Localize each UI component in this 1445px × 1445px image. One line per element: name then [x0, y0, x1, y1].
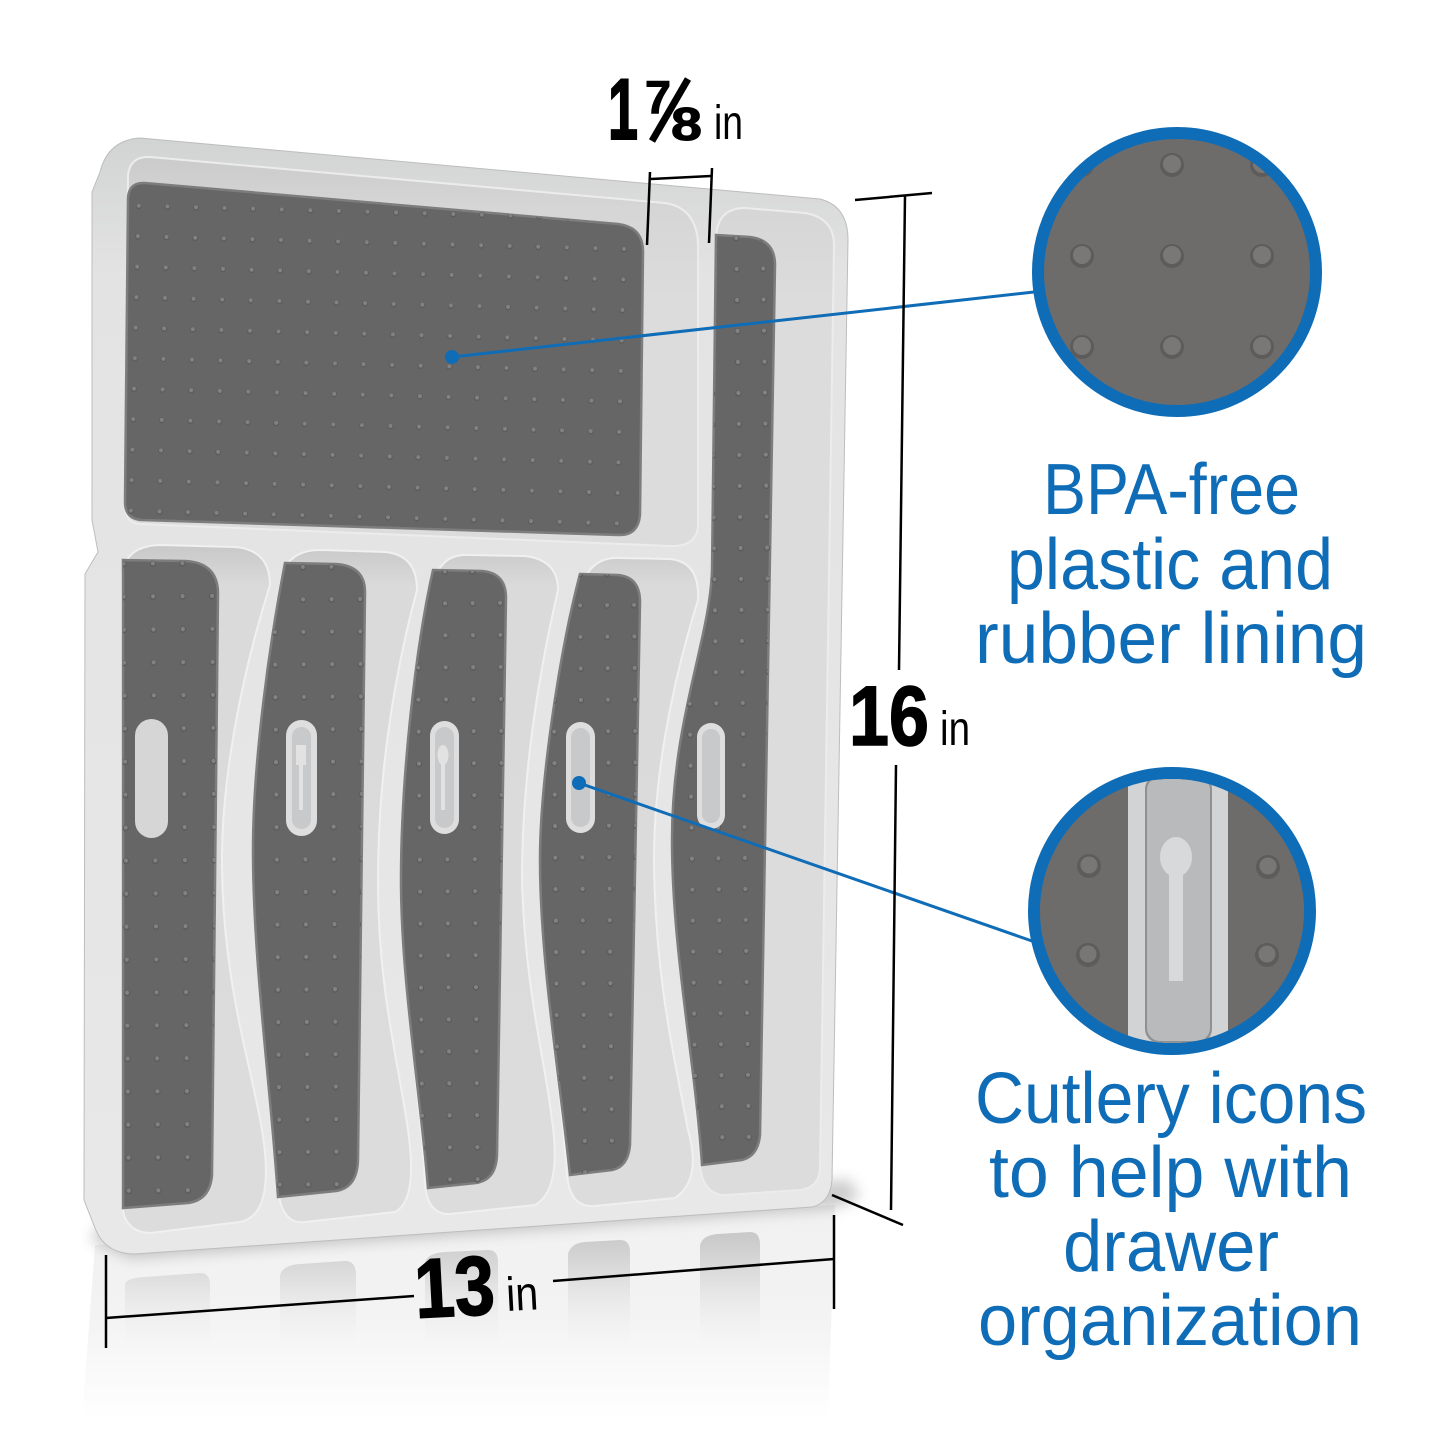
dimension: 16 in height: 16: [849, 669, 929, 763]
dimension: 13 in width: in: [505, 1267, 540, 1322]
slot 3: [401, 555, 558, 1214]
leader line: rubber lining: [445, 292, 1034, 364]
tray reflection: [82, 1205, 835, 1420]
tray body: [84, 138, 848, 1254]
dimension: 1 7/8 in width: 7: [645, 71, 671, 123]
cutlery tray: [84, 138, 848, 1254]
slot 1: [122, 545, 270, 1233]
heading: Cutlery icons to help with drawer organization: organization: [978, 1281, 1362, 1361]
heading: Cutlery icons to help with drawer organization: drawer: [1063, 1207, 1279, 1287]
dimension: 13 in width: 13: [412, 1238, 497, 1336]
heading: BPA-free plastic and rubber lining: [975, 450, 1367, 679]
dimension: 1 7/8 in width: 8: [671, 98, 702, 150]
dimension: 1 7/8 in width: [608, 62, 743, 245]
heading: Cutlery icons to help with drawer organization: Cutlery icons: [975, 1059, 1367, 1139]
heading: Cutlery icons to help with drawer organization: to help with: [989, 1133, 1352, 1213]
cutlery label pills: [135, 719, 725, 838]
heading: BPA-free plastic and rubber lining: rubber lining: [975, 599, 1367, 679]
dimension: 1 7/8 in width: in: [714, 97, 743, 150]
dimension: 13 in width: [106, 1215, 834, 1348]
dimension: 16 in height: in: [940, 703, 970, 756]
callout circle: cutlery icon detail: [1034, 770, 1310, 1060]
heading: BPA-free plastic and rubber lining: plastic and: [1007, 525, 1333, 605]
callout circle: rubber lining detail: [1038, 133, 1316, 411]
long right compartment: [672, 208, 834, 1195]
large compartment: [125, 157, 698, 546]
leader line: cutlery icon: [572, 776, 1032, 941]
slot 2: [253, 550, 417, 1222]
slot 4: [540, 558, 698, 1206]
dimension: 1 7/8 in width: 1: [608, 62, 638, 158]
tray contact shadow: [90, 1180, 860, 1258]
heading: BPA-free plastic and rubber lining: BPA-free: [1043, 450, 1300, 530]
dimension: 16 in height: [832, 193, 970, 1225]
heading: Cutlery icons to help with drawer organization: [975, 1059, 1367, 1361]
